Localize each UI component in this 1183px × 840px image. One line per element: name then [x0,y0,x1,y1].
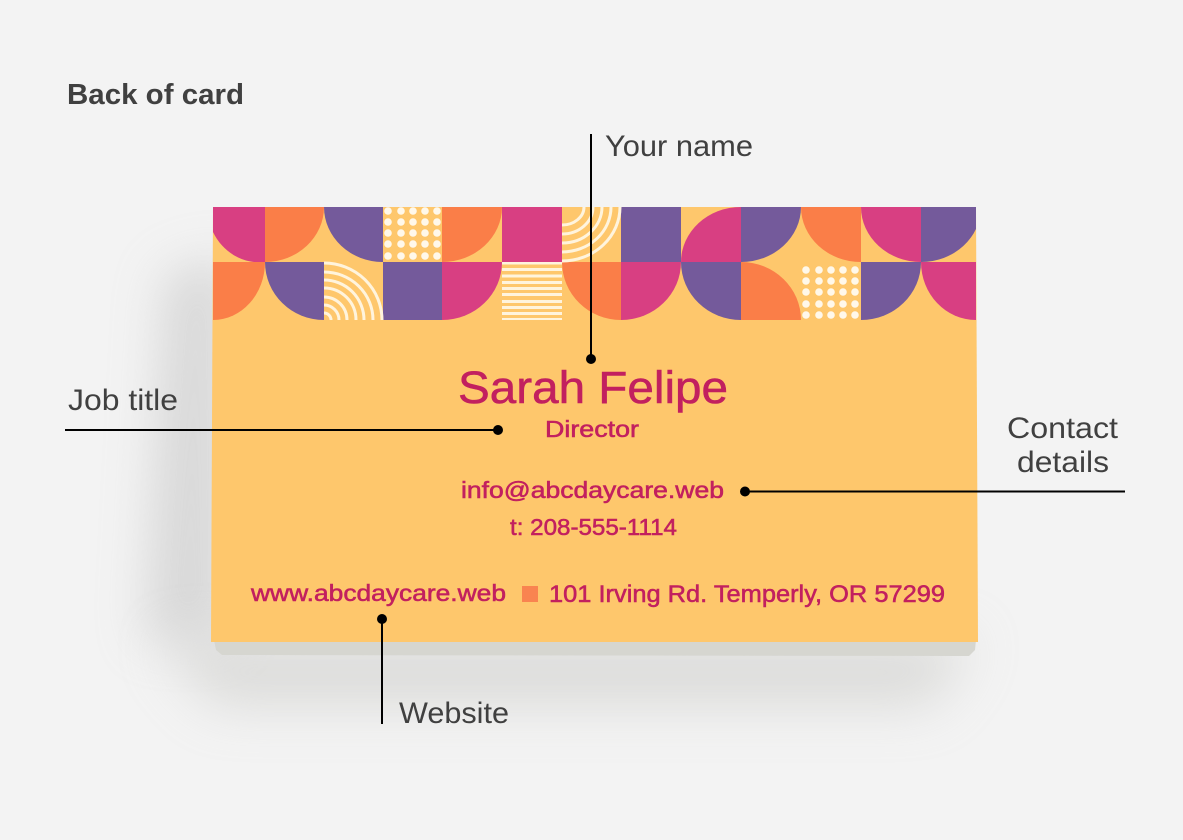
infographic canvas [65,83,1125,724]
dot pattern bottom [802,266,859,319]
row 2 shapes [213,262,976,320]
pointer line [740,486,1125,496]
card face [211,207,978,642]
callout: your name [586,130,753,364]
card separator square [522,586,538,602]
ring pattern top [562,207,620,261]
pointer line [65,425,503,435]
label: Job title [68,384,178,417]
pointer line [377,614,387,724]
callout: website [377,614,509,730]
callout: job title [65,384,503,435]
label: Website [399,697,509,730]
stripe pattern [502,262,562,320]
card website: www.abcdaycare.web [250,580,506,606]
label: Contact [1007,412,1119,445]
card name: Sarah Felipe [458,362,728,413]
business card [211,207,981,642]
card shadow [145,255,975,705]
heading: Back of card [67,79,244,111]
row 1 shapes [213,207,981,262]
callout: contact details [740,412,1125,496]
card edge [214,640,976,656]
label: details [1017,446,1109,479]
card address: 101 Irving Rd. Temperly, OR 57299 [549,581,945,608]
card phone: t: 208-555-1114 [510,514,677,540]
label [1007,412,1119,479]
label: Your name [605,130,753,163]
ring pattern bottom [324,263,382,320]
pointer line [586,134,596,364]
geometric pattern [213,207,981,320]
dot pattern top [384,207,441,260]
card email: info@abcdaycare.web [461,477,724,503]
card job title: Director [545,416,639,442]
